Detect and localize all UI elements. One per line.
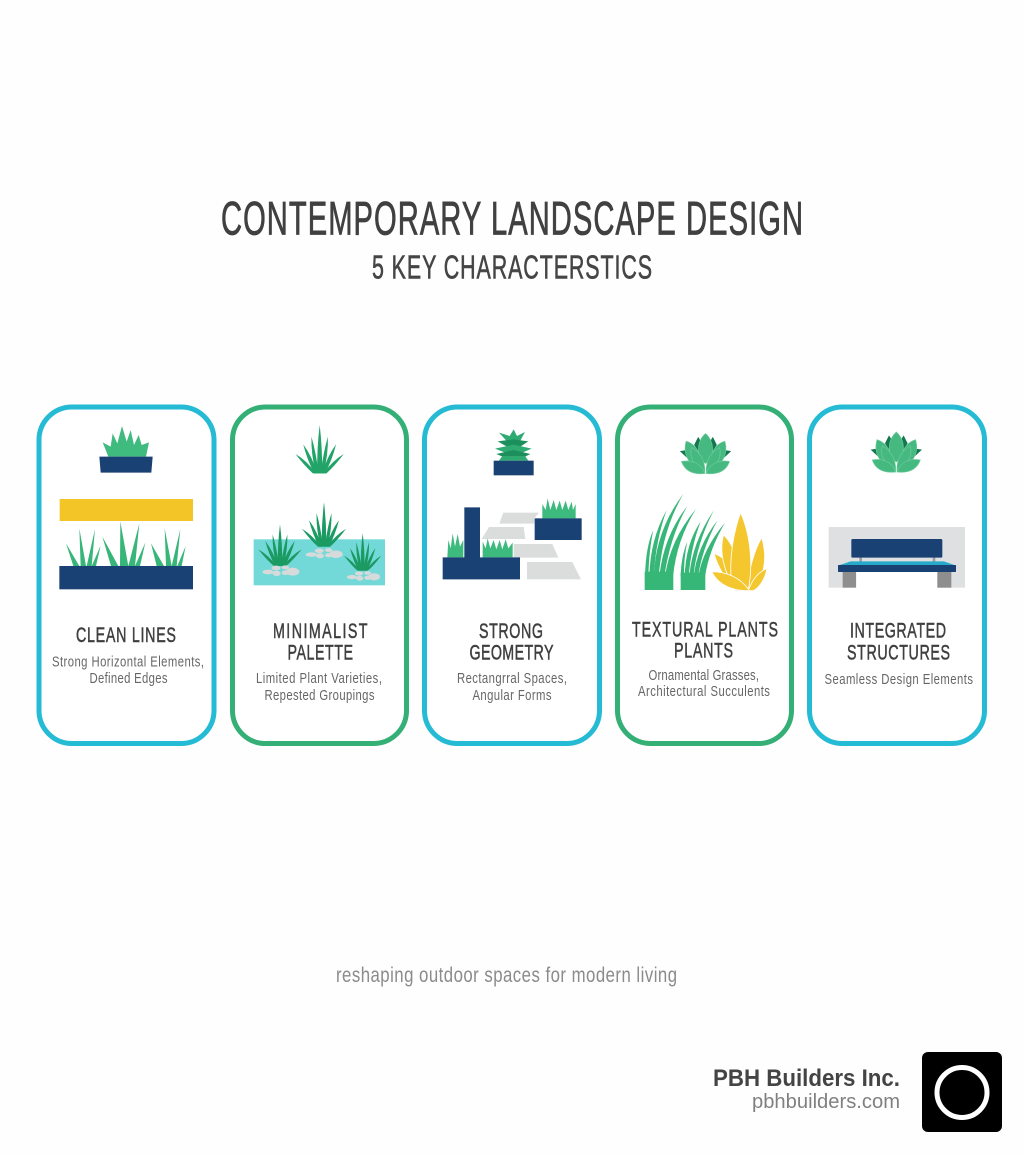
text: strong geometry description: Rectangrral Spaces, [457,670,567,686]
heading: clean lines: CLEAN LINES [76,623,176,647]
icon: small planter with grass [99,426,153,473]
panel: clean lines [39,407,214,744]
text: strong geometry description [457,670,567,703]
panel: minimalist palette [232,407,406,744]
heading: strong geometry: STRONG [479,619,543,643]
text: strong geometry description: Angular Forms [472,687,552,703]
footer: website: pbhbuilders.com [752,1090,900,1113]
icon: geometric planters and paving [443,498,582,579]
text: textural plants description: Ornamental Grasses, [648,667,759,683]
icon: grass tuft [295,425,344,473]
text: minimalist palette description: Repested Groupings [264,687,375,703]
title: CONTEMPORARY LANDSCAPE DESIGN [221,194,803,245]
footer: company name: PBH Builders Inc. [713,1065,900,1092]
heading: minimalist palette [273,619,368,664]
panel: integrated structures [810,407,984,744]
heading: strong geometry: GEOMETRY [470,641,554,664]
text: integrated structures description: Seamless Design Elements [824,671,973,687]
heading: textural plants [632,618,778,662]
heading: textural plants: PLANTS [674,639,733,662]
panel: textural plants [618,407,792,744]
icon: bench against wall [829,527,965,588]
text: textural plants description [638,667,770,699]
icon: ornamental grasses and yellow succulent [645,494,767,591]
text: clean lines description: Defined Edges [90,670,168,686]
heading: minimalist palette: PALETTE [288,641,353,664]
icon: horizontal bars with grass [59,499,193,589]
heading: integrated structures: STRUCTURES [847,641,950,664]
text: minimalist palette description: Limited Plant Varieties, [256,670,382,686]
heading: integrated structures [847,619,950,664]
icon: succulent rosette [871,432,922,472]
text: textural plants description: Architectural Succulents [638,683,770,699]
icon: layered succulent in planter [494,429,534,475]
heading: minimalist palette: MINIMALIST [273,619,368,643]
heading: strong geometry [470,619,554,664]
text: clean lines description: Strong Horizontal Elements, [52,653,204,670]
text: clean lines description [52,653,204,686]
heading: textural plants: TEXTURAL PLANTS [632,618,778,641]
icon: pond with plants and stones [254,502,385,585]
heading: integrated structures: INTEGRATED [850,619,946,642]
text: minimalist palette description [256,670,382,703]
logo [922,1052,1002,1132]
panel: strong geometry [424,407,600,744]
icon: succulent rosette [680,434,731,474]
tagline: reshaping outdoor spaces for modern living [336,964,677,988]
subtitle: 5 KEY CHARACTERSTICS [372,249,652,286]
